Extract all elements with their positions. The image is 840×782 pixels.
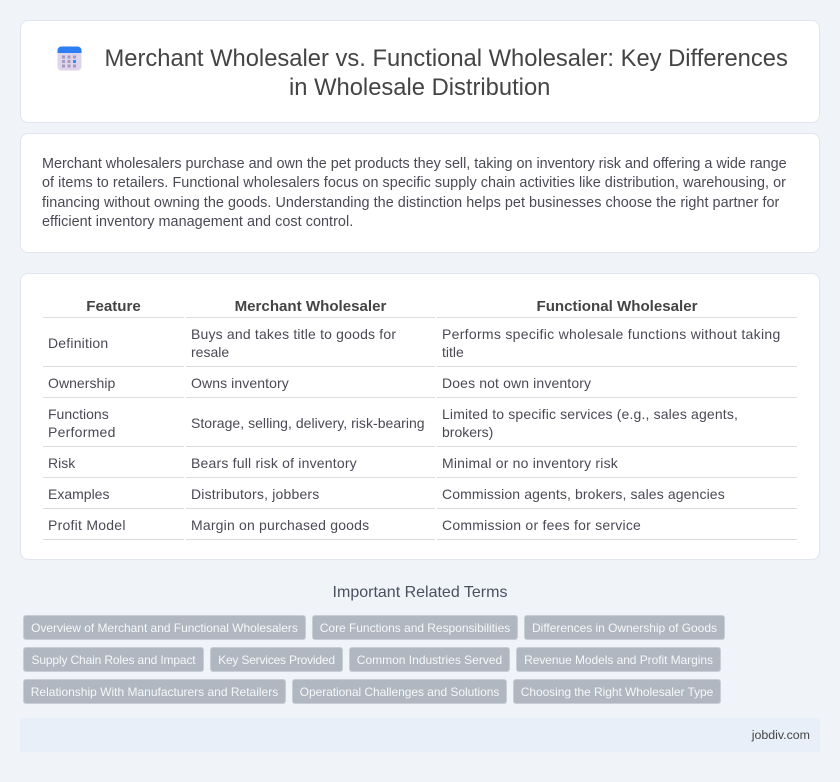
comparison table: Examples — [48, 486, 109, 502]
footer source: jobdiv.com — [752, 728, 810, 742]
related term tags: Supply Chain Roles and Impact — [31, 653, 196, 667]
comparison table: title — [442, 344, 464, 360]
panel: comparison table card — [20, 273, 820, 560]
comparison table: Distributors, jobbers — [191, 486, 319, 502]
related term tags — [23, 615, 725, 704]
comparison table: Merchant Wholesaler — [235, 298, 386, 315]
panel: title card — [20, 20, 820, 123]
related term tags: Overview of Merchant and Functional Wholesalers — [31, 621, 298, 635]
text block: introduction: efficient inventory management and cost control. — [42, 214, 353, 230]
comparison table: Performed — [48, 424, 116, 440]
comparison table: Profit Model — [48, 517, 126, 533]
comparison table: Ownership — [48, 375, 115, 391]
panel: introduction card — [20, 133, 820, 253]
comparison table: Risk — [48, 455, 75, 471]
comparison table: Minimal or no inventory risk — [442, 455, 618, 471]
comparison table: Functions — [48, 406, 109, 422]
comparison table — [43, 298, 797, 540]
heading: important related terms: Important Related Terms — [333, 584, 507, 601]
comparison table: Definition — [48, 335, 108, 351]
comparison table: Functional Wholesaler — [536, 298, 698, 315]
comparison table: Storage, selling, delivery, risk-bearing — [191, 415, 425, 431]
heading: title: in Wholesale Distribution — [289, 74, 550, 101]
related term tags: Core Functions and Responsibilities — [320, 621, 510, 635]
icon: calendar — [58, 46, 82, 70]
text block: introduction: of items to retailers. Functional wholesalers focus on specific supply chain activities like distribution, warehousing, or — [42, 175, 786, 191]
comparison table: Does not own inventory — [442, 375, 591, 391]
related term tags: Key Services Provided — [218, 653, 335, 667]
related term tags: Operational Challenges and Solutions — [300, 685, 499, 699]
heading: title: Merchant Wholesaler vs. Functional Wholesaler: Key Differences — [104, 45, 788, 72]
comparison table: resale — [191, 344, 229, 360]
comparison table: Commission agents, brokers, sales agencies — [442, 486, 725, 502]
related term tags: Relationship With Manufacturers and Retailers — [31, 685, 278, 699]
comparison table: Feature — [86, 298, 141, 315]
comparison table: Limited to specific services (e.g., sales agents, — [442, 406, 738, 422]
comparison table: Margin on purchased goods — [191, 517, 369, 533]
footer bar — [20, 718, 820, 752]
text block: introduction: financing without owning the goods. Understanding the distinction helps pet businesses choose the right partner for — [42, 194, 779, 210]
related term tags: Choosing the Right Wholesaler Type — [521, 685, 713, 699]
comparison table: Performs specific wholesale functions without taking — [442, 326, 781, 342]
text block: introduction: Merchant wholesalers purchase and own the pet products they sell, taking on inventory risk and offering a wide range — [42, 156, 787, 172]
related term tags: Differences in Ownership of Goods — [532, 621, 717, 635]
related term tags: Revenue Models and Profit Margins — [524, 653, 713, 667]
heading: title — [104, 45, 788, 101]
related term tags: Common Industries Served — [357, 653, 502, 667]
comparison table: brokers) — [442, 424, 493, 440]
text block: introduction — [42, 156, 787, 230]
comparison table: Buys and takes title to goods for — [191, 326, 396, 342]
comparison table: Bears full risk of inventory — [191, 455, 357, 471]
comparison table: Commission or fees for service — [442, 517, 641, 533]
comparison table: Owns inventory — [191, 375, 289, 391]
